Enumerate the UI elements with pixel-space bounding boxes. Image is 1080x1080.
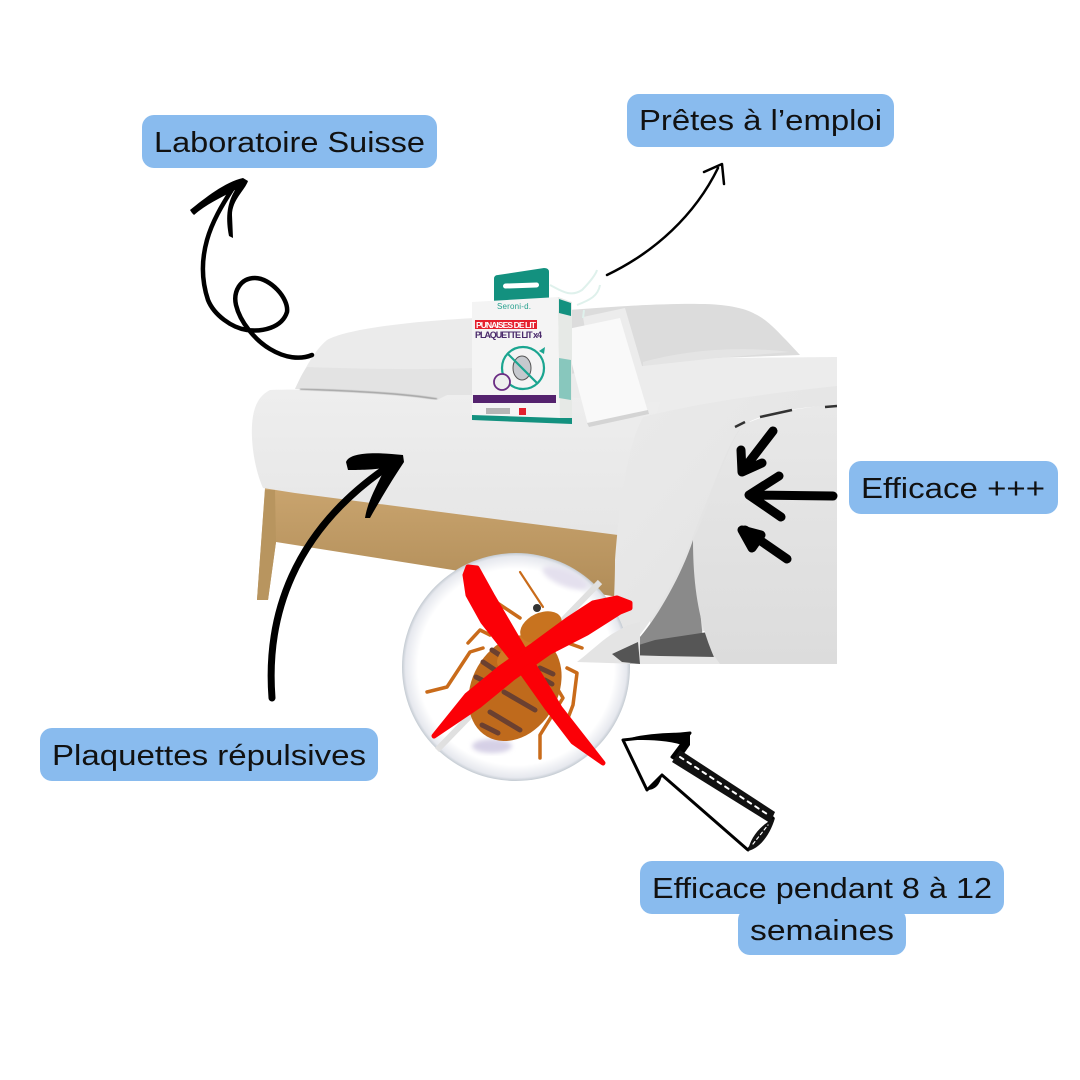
label: prêtes à l'emploi: Prêtes à l’emploi	[639, 105, 882, 137]
mattress sheet	[252, 390, 660, 536]
right hanging blanket	[693, 404, 837, 664]
arrow: prêtes à l'emploi	[607, 164, 724, 275]
arrow: laboratoire	[190, 178, 312, 358]
purple banner	[473, 395, 556, 403]
box face	[472, 297, 560, 420]
blanket underlay	[650, 415, 750, 640]
left blanket fold	[613, 386, 837, 653]
wooden bed frame	[257, 488, 618, 600]
sketched arrow: 8 à 12 semaines	[623, 733, 775, 851]
back pillow	[558, 304, 800, 374]
red cross	[434, 567, 630, 763]
bed bug circle	[402, 553, 640, 781]
blanket seen through circle	[577, 622, 640, 664]
bug icon with prohibition ring	[502, 347, 544, 389]
label: efficace pendant 8 à 12 semaines: Efficace pendant 8 à 12	[652, 873, 992, 905]
dark underside of blanket	[640, 540, 702, 644]
product box: PUNAISES DE LIT	[476, 320, 537, 330]
bed illustration	[252, 304, 837, 664]
label: plaquettes répulsives: Plaquettes répulsives	[52, 740, 366, 772]
product plate	[563, 308, 652, 427]
label: efficace +++	[849, 461, 1058, 514]
bug body	[450, 618, 580, 758]
smoke wisp	[550, 270, 600, 318]
label: efficace pendant 8 à 12 semaines	[640, 861, 1004, 955]
label: prêtes à l'emploi	[627, 94, 894, 147]
label: efficace pendant 8 à 12 semaines: semaines	[750, 915, 894, 947]
front pillow	[304, 318, 472, 370]
red heading	[475, 320, 537, 329]
bug legs	[427, 572, 582, 758]
brand name: Seroni-d.	[497, 302, 531, 311]
arrows: efficace	[741, 431, 833, 559]
arrow: plaquettes répulsives	[271, 453, 404, 698]
box hanger tab	[494, 268, 549, 302]
label: efficace +++: Efficace +++	[861, 473, 1045, 505]
back sheet	[572, 357, 837, 414]
label: laboratoire suisse: Laboratoire Suisse	[154, 127, 425, 159]
purple heading: PLAQUETTE LIT x4	[475, 330, 542, 340]
product box	[472, 268, 600, 424]
label: laboratoire suisse	[142, 115, 437, 168]
label: plaquettes répulsives	[40, 728, 378, 781]
